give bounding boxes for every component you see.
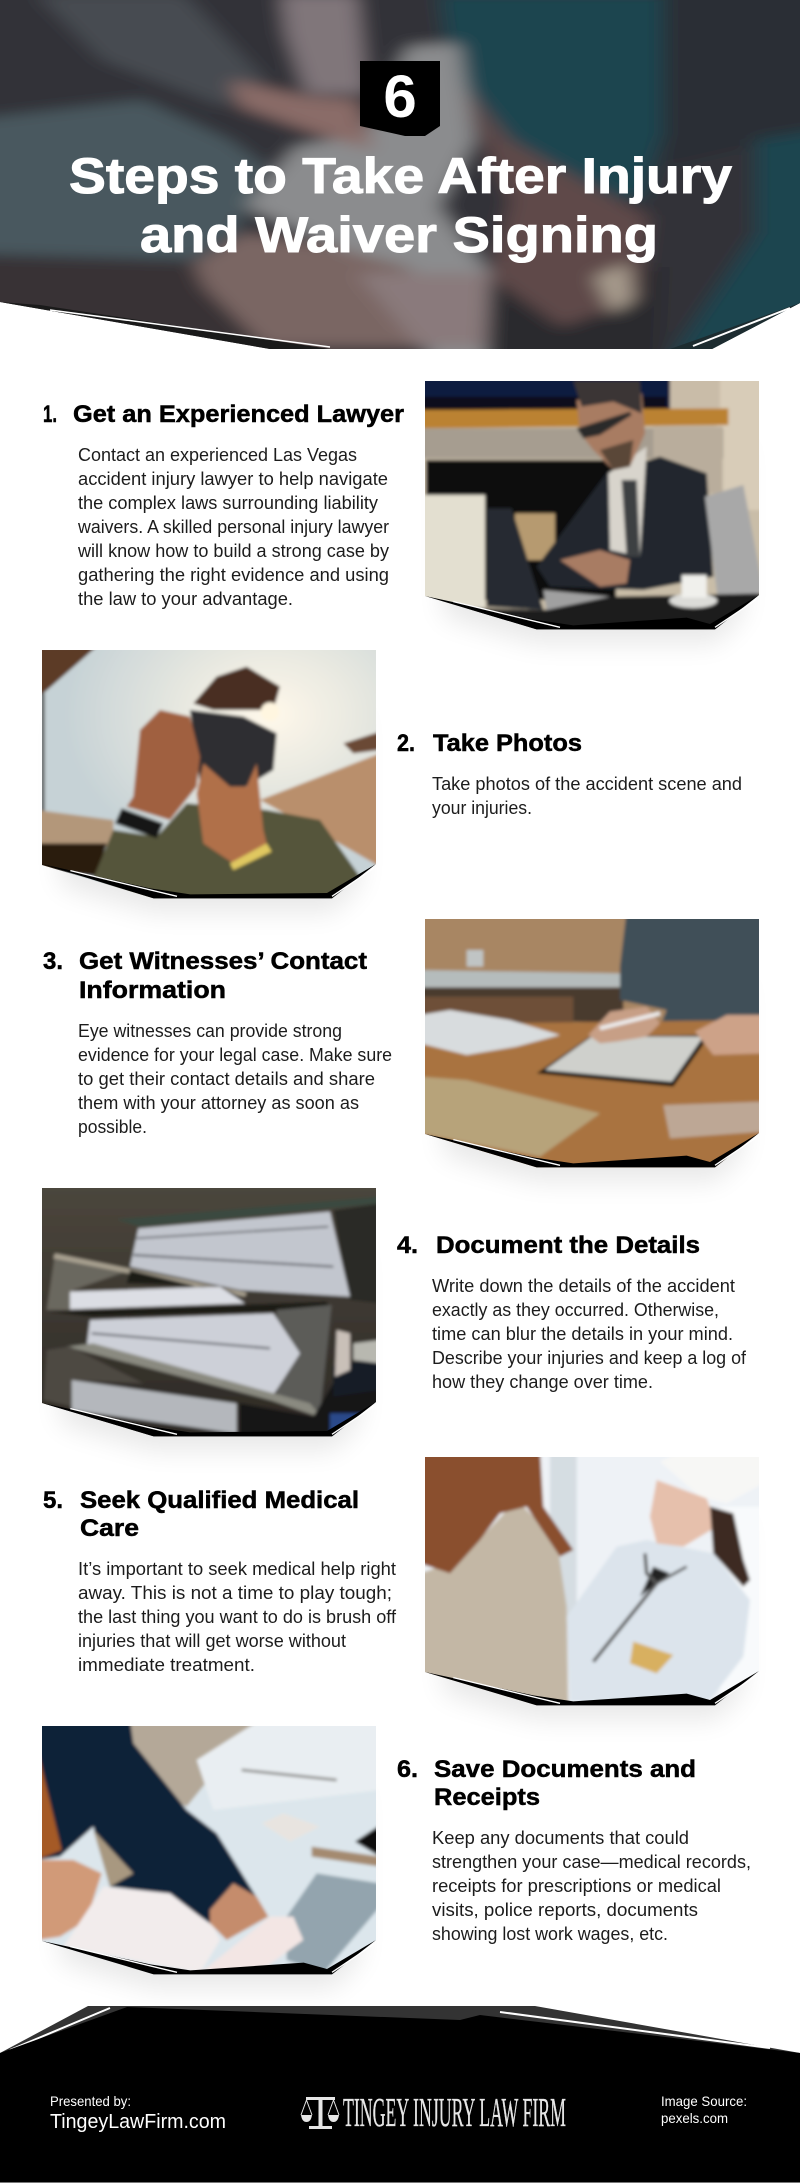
title [69,148,732,263]
step 6 text: Save Documents and [434,1756,696,1783]
photo 6: signing documents at desk [37,1720,380,1988]
photo 5: doctor with stethoscope [420,1450,763,1719]
step 5 text: Seek Qualified Medical [80,1487,359,1514]
photo 2: person with camera [37,643,380,912]
step 1 text: Get an Experienced Lawyer [73,401,404,428]
step 1 text: the law to your advantage. [78,589,293,609]
step 3 text: Eye witnesses can provide strong [78,1021,342,1041]
step 2 text: 2. [397,730,415,757]
step 3 text: evidence for your legal case. Make sure [78,1045,392,1065]
step 4 text: time can blur the details in your mind. [432,1324,733,1344]
step 4 text: Write down the details of the accident [432,1276,735,1296]
step 5 text: away. This is not a time to play tough; [78,1583,392,1603]
step 2 text: Take photos of the accident scene and [432,774,742,794]
step 5 text: injuries that will get worse without [78,1631,346,1651]
image source [661,2093,747,2126]
number badge [360,61,440,136]
presented by: Presented by: [50,2093,131,2109]
step 3 text [43,948,392,1137]
step 5 text: 5. [43,1487,63,1514]
number badge: 6 [383,63,417,130]
step 6 text: receipts for prescriptions or medical [432,1876,721,1896]
step 3 text: them with your attorney as soon as [78,1093,359,1113]
bottom ribbon [425,595,759,629]
step 2 text [397,730,742,818]
photo 3: clipboard on table [420,910,763,1181]
photo 4: stacked binders [37,1180,380,1450]
bottom ribbon [42,864,376,898]
presented by [50,2093,226,2133]
photo 1: lawyer at laptop [420,373,763,643]
presented by: TingeyLawFirm.com [50,2111,226,2133]
step 3 text: to get their contact details and share [78,1069,375,1089]
step 5 text: immediate treatment. [78,1655,255,1675]
step 6 text: strengthen your case—medical records, [432,1852,751,1872]
step 3 text: 3. [43,948,63,975]
bottom ribbon [425,1671,759,1705]
step 4 text: 4. [397,1232,418,1259]
header panel with photo of bandaged hands [0,0,800,380]
bottom ribbon [42,1402,376,1436]
step 6 text: Keep any documents that could [432,1828,689,1848]
bottom ribbon [425,1133,759,1167]
step 1 text: waivers. A skilled personal injury lawyer [77,517,389,537]
title: Steps to Take After Injury [69,148,732,204]
image source: Image Source: [661,2093,747,2109]
step 6 text [397,1756,751,1944]
law firm logo [301,2089,566,2135]
step 1 text: gathering the right evidence and using [78,565,389,585]
step 6 text: 6. [397,1756,418,1783]
image source: pexels.com [661,2110,728,2126]
step 1 text [43,401,404,609]
step 1 text: the complex laws surrounding liability [78,493,378,513]
title: and Waiver Signing [140,207,658,263]
step 6 text: showing lost work wages, etc. [432,1924,668,1944]
step 1 text: 1. [43,401,57,428]
step 2 text: your injuries. [432,798,532,818]
step 4 text: Document the Details [436,1232,700,1259]
step 4 text [397,1232,747,1392]
step 4 text: Describe your injuries and keep a log of [432,1348,747,1368]
step 6 text: visits, police reports, documents [432,1900,698,1920]
step 1 text: will know how to build a strong case by [77,541,389,561]
step 4 text: exactly as they occurred. Otherwise, [432,1300,719,1320]
step 5 text: Care [80,1515,139,1542]
step 5 text: It’s important to seek medical help right [78,1559,396,1579]
step 1 text: Contact an experienced Las Vegas [78,445,357,465]
header bottom edge [0,302,800,349]
step 3 text: possible. [78,1117,147,1137]
bottom ribbon [42,1940,376,1974]
step 2 text: Take Photos [433,730,582,757]
footer panel [0,2006,800,2183]
step 3 text: Get Witnesses’ Contact [79,948,367,975]
step 6 text: Receipts [434,1784,540,1811]
step 5 text: the last thing you want to do is brush off [78,1607,397,1627]
step 1 text: accident injury lawyer to help navigate [78,469,388,489]
step 4 text: how they change over time. [432,1372,653,1392]
step 5 text [43,1487,397,1675]
step 3 text: Information [79,977,226,1004]
